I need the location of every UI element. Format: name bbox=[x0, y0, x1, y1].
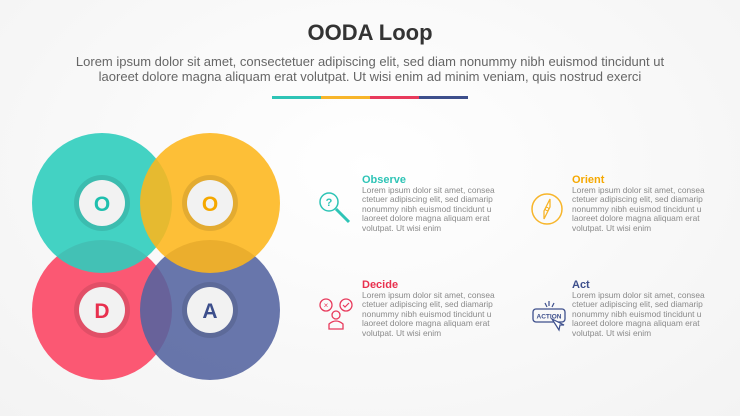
item: orient: laoreet dolore magna aliquam erat bbox=[572, 213, 700, 223]
subtitle: laoreet dolore magna aliquam erat volutpat. Ut wisi enim ad minim veniam, quis nostrud exerci bbox=[99, 69, 641, 84]
item: act: ctetuer adipiscing elit, sed diamarip bbox=[572, 299, 703, 309]
item: act: nonummy nibh euismod tincidunt u bbox=[572, 309, 701, 319]
letter D bbox=[74, 282, 130, 338]
item: act: Lorem ipsum dolor sit amet, consea bbox=[572, 290, 705, 300]
item: decide: ctetuer adipiscing elit, sed diamarip bbox=[362, 299, 493, 309]
title: OODA Loop bbox=[307, 20, 433, 45]
item: decide: volutpat. Ut wisi enim bbox=[362, 328, 441, 338]
letter O orange: O bbox=[202, 193, 218, 216]
item: observe: nonummy nibh euismod tincidunt u bbox=[362, 204, 491, 214]
item: observe: Observe bbox=[362, 174, 406, 186]
item: observe: laoreet dolore magna aliquam erat bbox=[362, 213, 490, 223]
underline bars bbox=[272, 96, 468, 99]
letter O orange bbox=[182, 175, 238, 231]
item: orient: Orient bbox=[572, 174, 604, 186]
item: observe: volutpat. Ut wisi enim bbox=[362, 223, 441, 233]
item: observe: Lorem ipsum dolor sit amet, consea bbox=[362, 185, 495, 195]
item: act: volutpat. Ut wisi enim bbox=[572, 328, 651, 338]
item: observe: ctetuer adipiscing elit, sed diamarip bbox=[362, 194, 493, 204]
item: decide: laoreet dolore magna aliquam erat bbox=[362, 318, 490, 328]
item: orient bbox=[572, 174, 705, 233]
venn circles diagram bbox=[32, 133, 280, 380]
icon: action button bbox=[532, 301, 566, 332]
letter O teal bbox=[74, 175, 130, 231]
letter A bbox=[182, 282, 238, 338]
item: decide: Decide bbox=[362, 279, 398, 291]
item: orient: nonummy nibh euismod tincidunt u bbox=[572, 204, 701, 214]
item: decide bbox=[362, 279, 495, 338]
icon: decide person bbox=[319, 298, 353, 330]
item: act: Act bbox=[572, 279, 590, 291]
item: orient: ctetuer adipiscing elit, sed diamarip bbox=[572, 194, 703, 204]
letter O teal: O bbox=[94, 193, 110, 216]
icon: magnifier question bbox=[319, 192, 350, 223]
letter A: A bbox=[202, 300, 218, 323]
letter D: D bbox=[94, 300, 110, 323]
icon: compass bbox=[531, 193, 563, 225]
item: decide: Lorem ipsum dolor sit amet, consea bbox=[362, 290, 495, 300]
item: decide: nonummy nibh euismod tincidunt u bbox=[362, 309, 491, 319]
icon: magnifier question: ? bbox=[326, 197, 333, 209]
subtitle bbox=[76, 54, 664, 84]
item: observe bbox=[362, 174, 495, 233]
item: orient: Lorem ipsum dolor sit amet, consea bbox=[572, 185, 705, 195]
subtitle: Lorem ipsum dolor sit amet, consectetuer adipiscing elit, sed diam nonummy nibh euismod tincidunt ut bbox=[76, 54, 664, 69]
item: orient: volutpat. Ut wisi enim bbox=[572, 223, 651, 233]
icon: action button: ACTION bbox=[537, 314, 562, 320]
icon: decide person: × bbox=[324, 301, 329, 310]
item: act: laoreet dolore magna aliquam erat bbox=[572, 318, 700, 328]
item: act bbox=[572, 279, 705, 338]
